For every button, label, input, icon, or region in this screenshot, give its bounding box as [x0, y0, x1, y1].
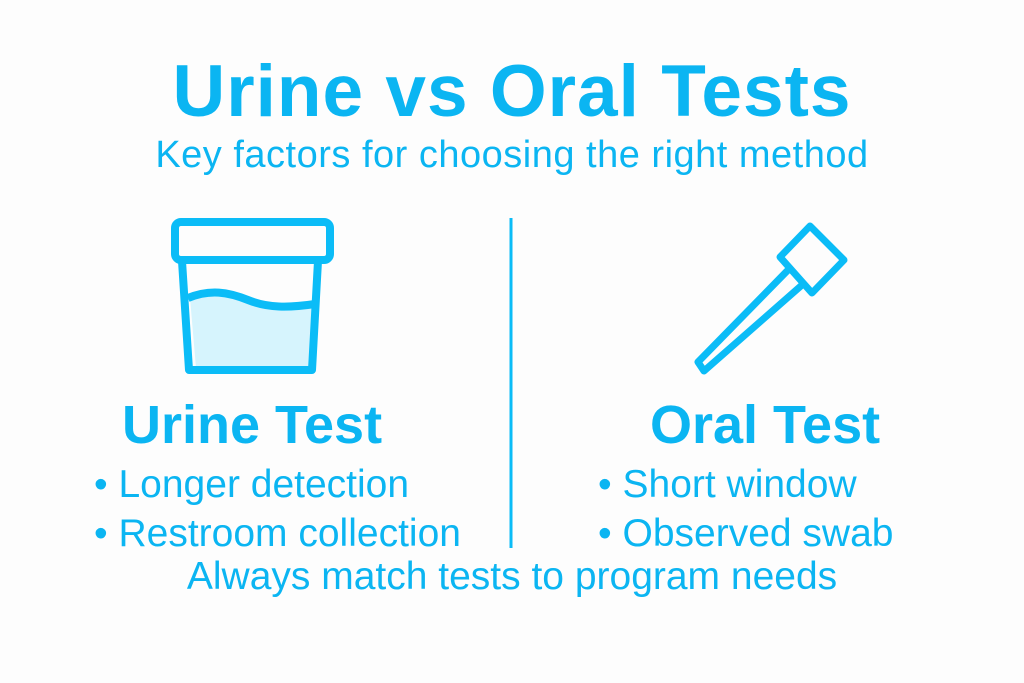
heading: oral test: Oral Test	[650, 395, 880, 455]
footer: Always match tests to program needs	[187, 555, 837, 598]
title: Urine vs Oral Tests	[172, 51, 852, 132]
bullets: oral: • Short window	[598, 463, 857, 506]
divider	[510, 218, 512, 548]
heading: urine test: Urine Test	[122, 395, 382, 455]
bullets: oral	[598, 463, 893, 555]
bullets: oral: • Observed swab	[598, 512, 893, 555]
bullets: urine: • Longer detection	[94, 463, 409, 506]
icon: urine cup	[175, 222, 330, 370]
icon: swab	[698, 226, 844, 371]
bullets: urine	[94, 463, 461, 555]
bullets: urine: • Restroom collection	[94, 512, 461, 555]
subtitle: Key factors for choosing the right method	[155, 134, 869, 176]
